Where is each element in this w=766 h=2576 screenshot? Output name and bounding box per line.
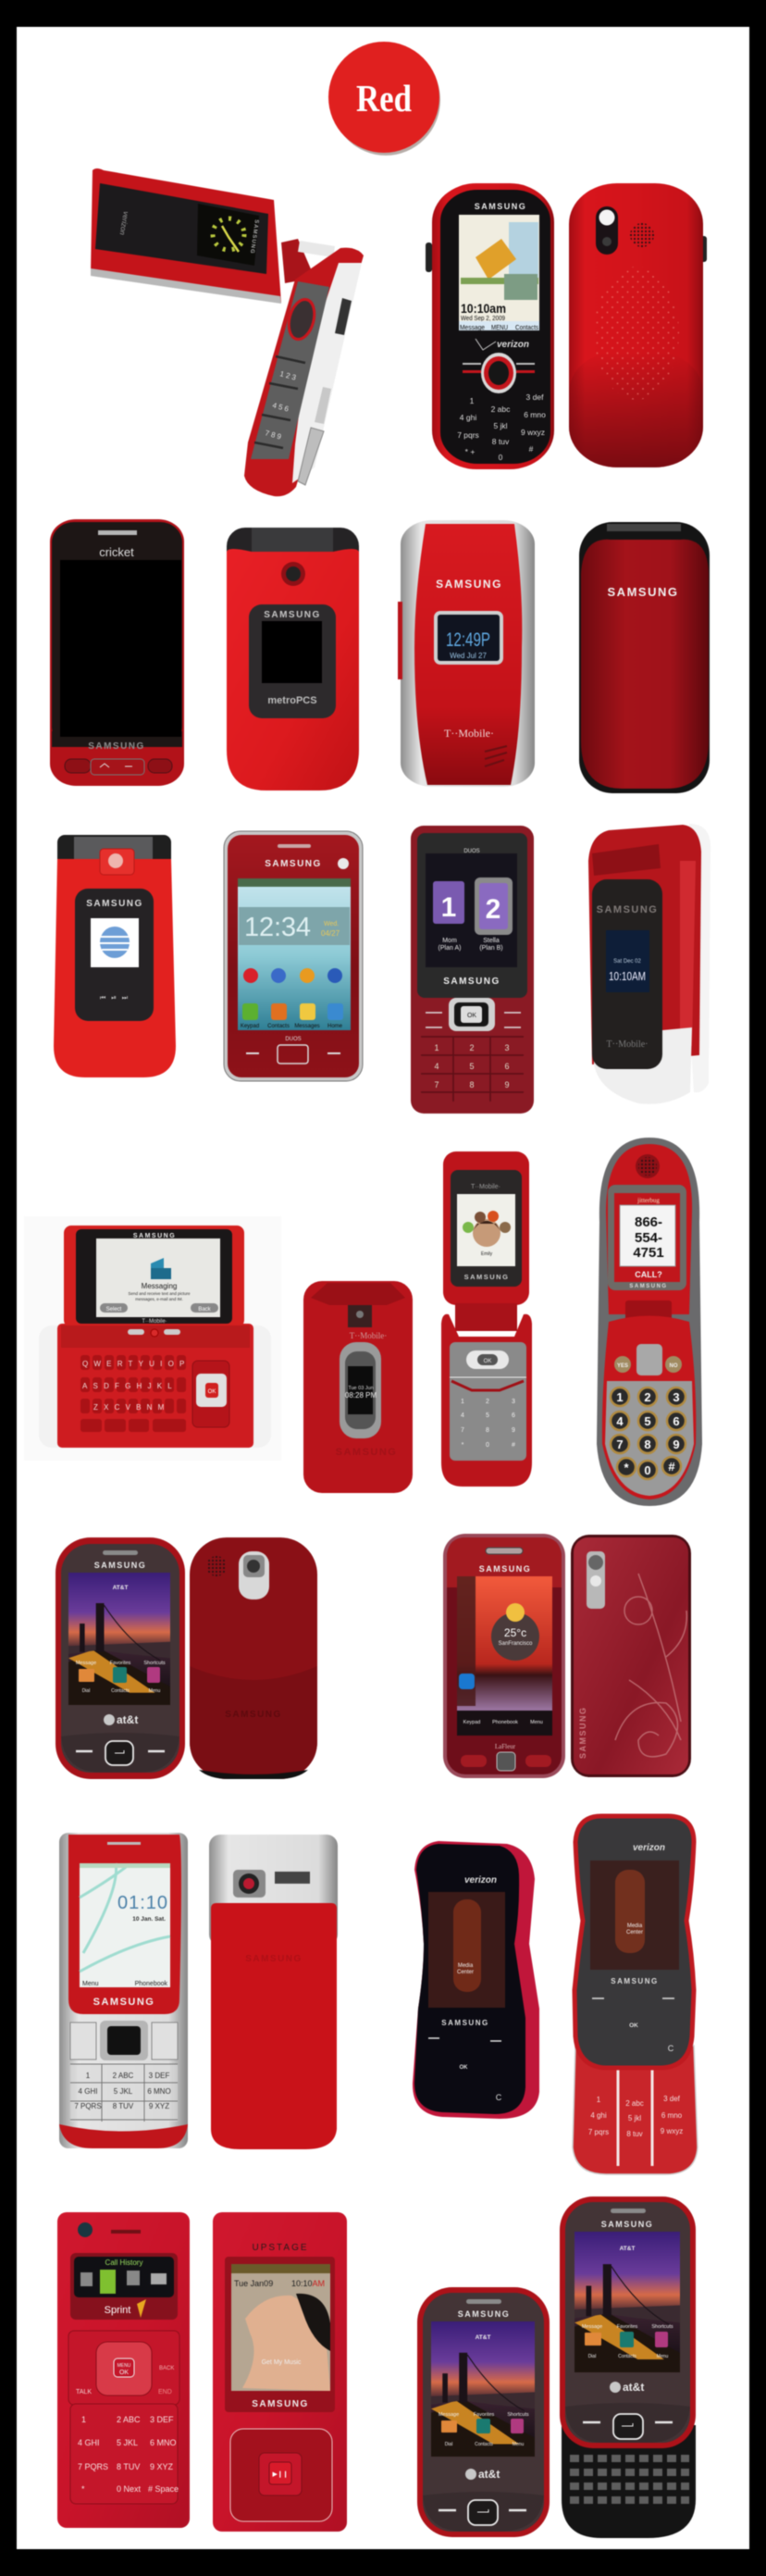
phone: Jitterbug: # bbox=[668, 1460, 675, 1474]
hinge bbox=[281, 239, 315, 283]
phone: Duos candybar: 2 bbox=[486, 894, 500, 925]
phone: verizon candybar front: Message bbox=[460, 323, 485, 331]
phone: AT&T QWERTY slider: at&t bbox=[623, 2381, 644, 2394]
phone: Verizon slider: 5 jkl bbox=[628, 2114, 641, 2122]
phone: Duos candybar: 4 bbox=[434, 1062, 439, 1071]
phone: AT&T QWERTY slider: Message bbox=[582, 2324, 602, 2330]
phone: verizon candybar front: Wed Sep 2, 2009 bbox=[461, 316, 505, 322]
phone: Verizon slider: verizon bbox=[633, 1843, 665, 1853]
phone: T-Mobile QWERTY slider: T··Mobile· bbox=[142, 1319, 167, 1325]
phone: silver bar back bbox=[209, 1835, 338, 2149]
phone: UpStage: Get My Music bbox=[262, 2359, 302, 2366]
phone: verizon candybar front bbox=[426, 183, 554, 469]
phone: UpStage: 10:10AM bbox=[291, 2279, 325, 2288]
phone: AT&T front: Favorites bbox=[110, 1661, 131, 1666]
phone: Duos candybar: (Plan A) bbox=[439, 945, 461, 952]
phone: silver bar front: 4 GHI bbox=[79, 2087, 97, 2096]
phone: verizon candybar front: 2 abc bbox=[491, 404, 511, 414]
phone: Verizon slider: Media bbox=[627, 1923, 643, 1929]
phone: AT&T front bbox=[56, 1537, 185, 1779]
phone: T-Mobile QWERTY slider: QWERTYUIOP bbox=[82, 1360, 191, 1368]
phone: Verizon black touch: verizon bbox=[464, 1875, 497, 1885]
phone: Duos touch: 12:34 bbox=[244, 913, 311, 942]
phone: Duos touch: SAMSUNG bbox=[265, 859, 322, 869]
phone: Sprint: 1 bbox=[81, 2415, 86, 2424]
phone: verizon candybar front: 0 bbox=[499, 453, 503, 462]
phone: AT&T QWERTY slider: Contacts bbox=[618, 2354, 636, 2359]
phone: AT&T front: Message bbox=[76, 1661, 96, 1666]
phone: silver bar back: SAMSUNG bbox=[245, 1954, 303, 1964]
phone: Sprint: 9 XYZ bbox=[150, 2462, 174, 2471]
phone: Verizon black touch: OK bbox=[459, 2065, 468, 2071]
keypad: 1 bbox=[470, 396, 475, 405]
phone: Sprint: 2 ABC bbox=[117, 2415, 141, 2424]
phone: Verizon slider bbox=[573, 1816, 698, 2174]
phone: Duos touch: Keypad bbox=[241, 1024, 259, 1029]
phone: silver bar front: Menu bbox=[82, 1981, 99, 1987]
phone: Verizon slider: 3 def bbox=[663, 2095, 681, 2103]
phone: AT&T QWERTY slider: AT&T bbox=[620, 2246, 635, 2252]
phone: La Fleur front: SAMSUNG bbox=[479, 1564, 531, 1574]
phone: Duos candybar: OK bbox=[467, 1013, 476, 1019]
phone: AT&T QWERTY slider: Shortcuts bbox=[651, 2324, 673, 2330]
phone: Sprint: # Space bbox=[148, 2484, 179, 2494]
phone: T-Mobile closed flip: T··Mobile· bbox=[350, 1331, 387, 1340]
phone: AT&T red flip: ⏮ ⏯ ⏭ bbox=[100, 995, 130, 1002]
phone: T-Mobile open flip: # bbox=[512, 1442, 515, 1449]
phone: Sprint: 6 MNO bbox=[150, 2438, 177, 2447]
phone: Sprint bbox=[57, 2212, 190, 2528]
phone: T-Mobile QWERTY slider: Send and receive text and picture bbox=[128, 1291, 191, 1296]
phone: Sprint: 0 Next bbox=[117, 2484, 142, 2494]
phone: Duos candybar: 9 bbox=[504, 1080, 510, 1089]
phone: Duos candybar: 1 bbox=[434, 1043, 439, 1052]
phone: dark red flip back: SAMSUNG bbox=[608, 585, 678, 599]
phone: AT&T front: SAMSUNG bbox=[94, 1561, 146, 1570]
phone: T-Mobile QWERTY slider: OK bbox=[208, 1389, 216, 1395]
phone: T-Mobile open flip: 3 bbox=[512, 1399, 515, 1405]
phone: Sprint: MENU bbox=[117, 2363, 131, 2369]
phone: T-Mobile QWERTY slider: Back bbox=[198, 1307, 212, 1313]
phone: silver bar front: 10 Jan. Sat. bbox=[132, 1916, 166, 1923]
phone: Verizon black touch: Center bbox=[457, 1970, 474, 1975]
phone: La Fleur front: SanFrancisco bbox=[499, 1641, 533, 1647]
phone: T-Mobile QWERTY slider: ASDFGHJKL bbox=[82, 1382, 178, 1390]
nav ring bbox=[481, 353, 516, 393]
phone: Jitterbug: 9 bbox=[673, 1437, 680, 1451]
phone: verizon candybar front: # bbox=[529, 444, 534, 454]
phone: AT&T small front: Dial bbox=[445, 2442, 452, 2447]
phone: Sprint: TALK bbox=[76, 2389, 92, 2396]
phone: silver bar front: 3 DEF bbox=[149, 2072, 169, 2080]
phone: verizon candybar front: MENU bbox=[491, 323, 508, 331]
phone: AT&T QWERTY slider bbox=[560, 2196, 696, 2538]
phone: AT&T front: Shortcuts bbox=[143, 1661, 166, 1666]
phone: Duos touch: Contacts bbox=[267, 1024, 290, 1029]
phone: Verizon slider: 1 bbox=[597, 2096, 601, 2104]
phone: verizon candybar front: 8 tuv bbox=[492, 437, 510, 446]
phone: silver bar front bbox=[59, 1833, 188, 2148]
phone: UpStage: Tue Jan09 bbox=[234, 2279, 273, 2288]
phone: Duos candybar: 5 bbox=[469, 1062, 475, 1071]
phone: silver bar front: 1 bbox=[86, 2072, 91, 2080]
phone: La Fleur back bbox=[571, 1535, 691, 1777]
phone: Duos candybar: 6 bbox=[504, 1062, 510, 1071]
phone: Jitterbug: SAMSUNG bbox=[629, 1284, 668, 1289]
phone: Verizon slider: 4 ghi bbox=[590, 2111, 607, 2120]
phone: UpStage: UPSTAGE bbox=[252, 2243, 309, 2253]
phone: Jitterbug: 0 bbox=[644, 1463, 651, 1477]
phone: T-Mobile silver flip bbox=[398, 520, 535, 787]
phone: Verizon black touch: C bbox=[496, 2093, 502, 2102]
phone: La Fleur front: 25°c bbox=[504, 1626, 526, 1639]
phone: T-Mobile open flip: OK bbox=[484, 1359, 491, 1364]
phone: verizon candybar front: verizon bbox=[497, 340, 529, 350]
phone: T-Mobile QWERTY slider: SAMSUNG bbox=[133, 1233, 176, 1239]
phone: Duos candybar bbox=[411, 826, 534, 1114]
phone: T-Mobile open flip bbox=[441, 1151, 532, 1487]
phone: Duos candybar: DUOS bbox=[463, 849, 480, 854]
phone: silver bar front: SAMSUNG bbox=[93, 1997, 154, 2008]
phone: T-Mobile silver flip: 12:49P bbox=[446, 629, 490, 651]
phone: Sprint: 4 GHI bbox=[78, 2438, 100, 2447]
phone: Verizon slider: Center bbox=[626, 1930, 643, 1935]
phone: T-Mobile open flip: 5 bbox=[486, 1412, 489, 1419]
phone: Verizon slider: OK bbox=[629, 2022, 638, 2029]
phone: Verizon black touch: Media bbox=[458, 1963, 474, 1969]
phone: verizon candybar front: * + bbox=[465, 447, 475, 456]
phone: AT&T QWERTY slider: Menu bbox=[657, 2354, 668, 2359]
phone: La Fleur front: Keypad bbox=[463, 1720, 480, 1725]
phone: Verizon slider: 2 abc bbox=[625, 2099, 644, 2108]
phone: verizon swivel flip: 4 5 6 bbox=[271, 401, 290, 414]
phone: AT&T back bbox=[190, 1537, 317, 1779]
phone: Sprint: BACK bbox=[159, 2366, 174, 2371]
phone: T-Mobile side flip: SAMSUNG bbox=[597, 904, 658, 915]
phone: AT&T QWERTY slider: SAMSUNG bbox=[601, 2220, 653, 2229]
phone: T-Mobile open flip: 6 bbox=[512, 1412, 515, 1419]
phone: La Fleur back: SAMSUNG bbox=[578, 1706, 587, 1759]
phone: T-Mobile QWERTY slider bbox=[39, 1226, 271, 1448]
phone: Jitterbug: 4 bbox=[616, 1414, 624, 1428]
phone: Duos touch: Messages bbox=[294, 1024, 320, 1029]
phone: T-Mobile open flip: 2 bbox=[486, 1399, 489, 1405]
phone: UpStage: ▶❙❙ bbox=[272, 2470, 289, 2478]
phone: Duos touch: 04/27 bbox=[321, 929, 340, 938]
phone: UpStage: SAMSUNG bbox=[252, 2399, 309, 2409]
phone: T-Mobile open flip: SAMSUNG bbox=[464, 1273, 509, 1281]
phone: Duos candybar: 8 bbox=[469, 1080, 475, 1089]
phone: verizon candybar front: 6 mno bbox=[524, 410, 546, 419]
phone: Duos candybar: 2 bbox=[469, 1043, 475, 1052]
phone: Jitterbug: 1 bbox=[616, 1390, 624, 1404]
phone: AT&T front: Menu bbox=[149, 1688, 160, 1694]
phone: verizon swivel flip: 7 8 9 bbox=[264, 429, 283, 442]
phone: Duos candybar: SAMSUNG bbox=[443, 977, 500, 987]
phone: AT&T small front: Menu bbox=[513, 2442, 524, 2447]
phone: T-Mobile open flip: 0 bbox=[486, 1442, 489, 1449]
phone: T-Mobile open flip: 9 bbox=[512, 1427, 515, 1434]
phone: AT&T small front: AT&T bbox=[476, 2334, 490, 2341]
phone: Jitterbug: 3 bbox=[673, 1390, 680, 1404]
phone: dark red flip back bbox=[579, 522, 710, 793]
phone: Duos touch: Wed. bbox=[324, 921, 339, 927]
phone: T-Mobile open flip: 8 bbox=[486, 1427, 489, 1434]
phone: T-Mobile open flip: Emily bbox=[481, 1251, 493, 1257]
phone: Duos candybar: Stella bbox=[483, 938, 500, 944]
phone: T-Mobile silver flip: Wed Jul 27 bbox=[450, 652, 487, 660]
phone: cricket touchscreen: SAMSUNG bbox=[88, 741, 145, 752]
phone: La Fleur front: Phonebook bbox=[492, 1720, 518, 1725]
phone: AT&T front: Contacts bbox=[111, 1688, 130, 1694]
phone: Jitterbug: 5 bbox=[644, 1414, 651, 1428]
phone: Verizon black touch: SAMSUNG bbox=[441, 2019, 489, 2027]
screen bbox=[459, 215, 539, 330]
phone: AT&T small front bbox=[417, 2287, 550, 2537]
phone: La Fleur front bbox=[443, 1534, 565, 1778]
phone: T-Mobile side flip: T··Mobile· bbox=[607, 1039, 648, 1050]
phone: cricket touchscreen: cricket bbox=[99, 545, 134, 559]
phone: verizon candybar back bbox=[569, 183, 707, 467]
phone: Duos candybar: (Plan B) bbox=[479, 945, 503, 952]
phone: Jitterbug: 7 bbox=[616, 1437, 624, 1451]
phone: Jitterbug: jitterbug bbox=[636, 1197, 660, 1204]
phone: Verizon slider: 7 pqrs bbox=[588, 2128, 609, 2136]
phone: Jitterbug: 866- bbox=[635, 1214, 662, 1230]
phone: cricket touchscreen bbox=[50, 519, 184, 786]
phone: silver bar front: 5 JKL bbox=[114, 2087, 133, 2096]
phone: T-Mobile silver flip: SAMSUNG bbox=[436, 578, 502, 591]
phone: La Fleur front: Menu bbox=[530, 1720, 543, 1725]
phone: Sprint: 8 TUV bbox=[117, 2462, 140, 2471]
phone: Duos touch: Home bbox=[327, 1024, 343, 1029]
phone: Sprint: Call History bbox=[105, 2259, 142, 2267]
phone: Jitterbug: CALL? bbox=[635, 1270, 662, 1279]
phone: T-Mobile open flip: 1 bbox=[461, 1399, 464, 1405]
phone: Jitterbug: YES bbox=[617, 1363, 628, 1369]
phone: Verizon slider: 8 tuv bbox=[626, 2130, 643, 2138]
phone: T-Mobile open flip: T··Mobile· bbox=[471, 1184, 500, 1190]
phone: La Fleur front: LaFleur bbox=[495, 1743, 516, 1750]
phone: UpStage bbox=[213, 2212, 347, 2532]
phone: silver bar front: 01:10 bbox=[117, 1893, 167, 1913]
phone: AT&T small front: Shortcuts bbox=[507, 2412, 529, 2418]
phone: T-Mobile side flip: 10:10AM bbox=[609, 969, 646, 983]
phone: silver bar front: 2 ABC bbox=[113, 2072, 134, 2080]
phone: Verizon slider: SAMSUNG bbox=[611, 1977, 659, 1985]
faint image backing bbox=[24, 1216, 281, 1461]
phone: verizon candybar front: Contacts bbox=[515, 323, 538, 331]
phone: Duos touch bbox=[224, 831, 363, 1081]
phone: T-Mobile open flip: * bbox=[462, 1442, 464, 1449]
phone: AT&T small front: Contacts bbox=[475, 2442, 493, 2447]
phone: T-Mobile closed flip: SAMSUNG bbox=[336, 1447, 397, 1458]
phone: T-Mobile silver flip: T··Mobile· bbox=[444, 727, 494, 740]
phone: Jitterbug: * bbox=[624, 1461, 629, 1475]
phone: Sprint: 7 PQRS bbox=[78, 2462, 108, 2471]
phone: Jitterbug: 4751 bbox=[633, 1245, 664, 1261]
phone: Verizon black touch bbox=[413, 1841, 539, 2119]
phone: AT&T red flip: SAMSUNG bbox=[86, 899, 143, 909]
phone: AT&T QWERTY slider: Favorites bbox=[617, 2324, 638, 2330]
phone: verizon swivel flip: 1 2 3 bbox=[278, 369, 298, 382]
phone: Verizon slider: C bbox=[668, 2044, 674, 2053]
phone: T-Mobile closed flip bbox=[303, 1281, 413, 1493]
phone: T-Mobile QWERTY slider: messages, e-mail and IM. bbox=[135, 1297, 183, 1301]
phone: Duos candybar: 7 bbox=[434, 1080, 439, 1089]
phone: verizon candybar front: 10:10am bbox=[461, 301, 506, 316]
phone: AT&T front: at&t bbox=[117, 1713, 138, 1726]
phone: Duos candybar: 1 bbox=[441, 892, 456, 923]
phone: T-Mobile closed flip: 08:28 PM bbox=[345, 1391, 377, 1400]
phone: T-Mobile QWERTY slider: Messaging bbox=[142, 1282, 177, 1290]
phone: metroPCS flip: SAMSUNG bbox=[264, 610, 321, 620]
phone: AT&T front: AT&T bbox=[113, 1585, 128, 1591]
phone: Verizon slider: 6 mno bbox=[661, 2111, 683, 2120]
phone: Jitterbug: NO bbox=[670, 1363, 678, 1369]
phone: silver bar front: 9 XYZ bbox=[149, 2102, 169, 2110]
phone: Sprint: END bbox=[158, 2389, 172, 2396]
phone: T-Mobile closed flip: Tue 03 Jun bbox=[348, 1386, 374, 1391]
phone: T-Mobile side flip: Sat Dec 02 bbox=[613, 959, 642, 964]
phone: verizon candybar front: 7 pqrs bbox=[457, 430, 479, 440]
phone: silver bar front: 6 MNO bbox=[147, 2087, 171, 2096]
phone: Jitterbug: 8 bbox=[644, 1437, 651, 1451]
phone: Jitterbug bbox=[597, 1138, 702, 1506]
phone: AT&T small front: at&t bbox=[478, 2468, 500, 2481]
qwerty keys bbox=[80, 1355, 186, 1432]
phone: verizon candybar front: SAMSUNG bbox=[475, 202, 526, 211]
lower body bbox=[244, 248, 364, 496]
phone: Sprint: 5 JKL bbox=[117, 2438, 138, 2447]
phone: T-Mobile side flip bbox=[588, 824, 710, 1104]
phone: silver bar front: Phonebook bbox=[135, 1981, 167, 1987]
phone: AT&T front: Dial bbox=[82, 1688, 90, 1694]
phone: AT&T QWERTY slider: Dial bbox=[588, 2354, 596, 2359]
phone: T-Mobile open flip: 4 bbox=[461, 1412, 464, 1419]
phone: metroPCS flip: metroPCS bbox=[267, 695, 317, 706]
phone: Sprint: * bbox=[81, 2484, 85, 2494]
phone: T-Mobile QWERTY slider: Select bbox=[106, 1307, 122, 1313]
phone: verizon swivel flip: verizon bbox=[117, 211, 130, 236]
phone: verizon candybar front: 9 wxyz bbox=[521, 428, 545, 437]
phone: silver bar front: 7 PQRS bbox=[74, 2102, 102, 2110]
phone: Jitterbug: 554- bbox=[635, 1230, 662, 1246]
phone: Jitterbug: 2 bbox=[644, 1390, 651, 1404]
phone: silver bar front: 8 TUV bbox=[113, 2102, 134, 2110]
phone: Jitterbug: 6 bbox=[673, 1414, 680, 1428]
phone: Duos candybar: Mom bbox=[442, 938, 457, 944]
phone: Duos touch: DUOS bbox=[285, 1037, 302, 1042]
phone: T-Mobile open flip: 7 bbox=[461, 1427, 464, 1434]
phone: Sprint: 3 DEF bbox=[150, 2415, 174, 2424]
phone: Verizon slider: 9 wxyz bbox=[661, 2127, 683, 2135]
phone: AT&T red flip bbox=[54, 835, 176, 1077]
phone: verizon swivel flip: SAMSUNG bbox=[249, 219, 259, 255]
phone: AT&T small front: Message bbox=[439, 2412, 459, 2418]
phone: AT&T small front: Favorites bbox=[474, 2412, 495, 2418]
phone: T-Mobile QWERTY slider: ZXCVBNM bbox=[93, 1403, 170, 1412]
title badge: Red: Red bbox=[356, 77, 412, 119]
phone: Duos candybar: 3 bbox=[504, 1043, 510, 1052]
phone: verizon candybar front: 3 def bbox=[526, 392, 544, 402]
phone: AT&T small front: SAMSUNG bbox=[458, 2309, 510, 2319]
phone: verizon candybar front: 4 ghi bbox=[460, 413, 476, 422]
phone: metroPCS flip bbox=[227, 528, 359, 790]
swivel lid bbox=[91, 168, 281, 303]
phone: Sprint: OK bbox=[119, 2370, 129, 2376]
phone: verizon candybar front: 5 jkl bbox=[493, 421, 508, 430]
phone: Sprint: Sprint bbox=[105, 2305, 130, 2316]
title badge: Red bbox=[328, 42, 440, 156]
phone: AT&T back: SAMSUNG bbox=[225, 1710, 282, 1720]
phone: verizon swivel flip bbox=[91, 168, 364, 496]
